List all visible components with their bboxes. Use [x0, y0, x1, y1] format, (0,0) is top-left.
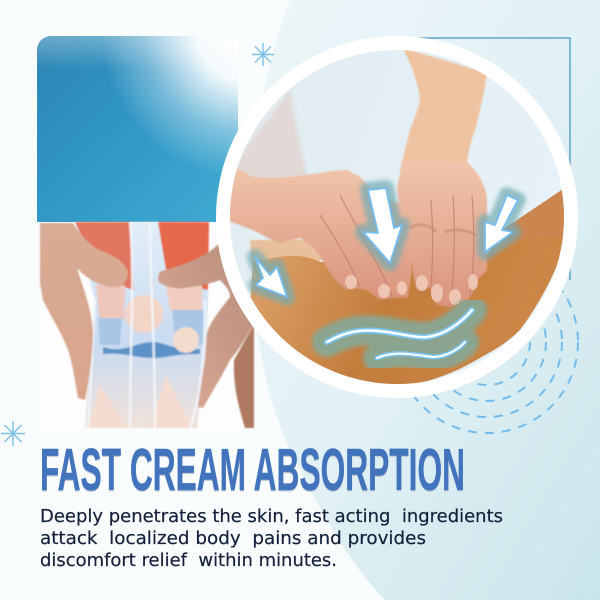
- arrow: left: [255, 257, 287, 297]
- left hand: [226, 163, 412, 300]
- right hand: [158, 223, 254, 408]
- arm right: [402, 48, 487, 165]
- left hand: [40, 223, 128, 400]
- nails: [345, 274, 478, 305]
- body text: discomfort relief within minutes.: [40, 550, 337, 571]
- icon: sparkle top: [252, 43, 274, 66]
- right hand: [397, 160, 487, 307]
- main leg: [250, 236, 566, 385]
- knuckles and finger detail: [320, 195, 476, 305]
- leg: [234, 324, 254, 428]
- body text: attack localized body pains and provides: [40, 528, 426, 549]
- knee anatomy: [75, 222, 209, 428]
- pale skin behind hand: [250, 240, 330, 266]
- decorative square frame: [400, 38, 570, 280]
- dashed concentric arcs: [396, 251, 578, 433]
- arrow glows: [255, 188, 518, 297]
- body text: Deeply penetrates the skin, fast acting ingredients: [40, 506, 503, 527]
- photo circle: massage: [216, 36, 580, 400]
- wave glows: [327, 310, 472, 358]
- panel: knee anatomy photo: [40, 222, 254, 430]
- panel: blue gradient card: [37, 36, 238, 222]
- body text: [40, 506, 503, 571]
- wavy absorption lines: [327, 310, 472, 358]
- arrow: right: [485, 195, 518, 252]
- icon: sparkle left: [1, 421, 25, 446]
- white shirt: [236, 92, 307, 178]
- upper far leg: [486, 190, 564, 258]
- arrow: centre down: [363, 188, 402, 263]
